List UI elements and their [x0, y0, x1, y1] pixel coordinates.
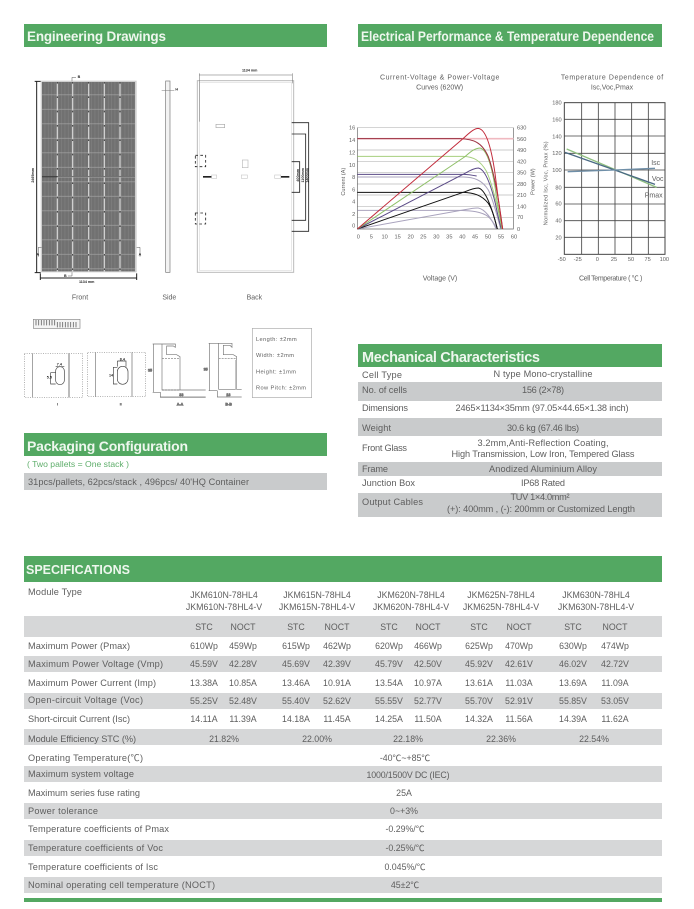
row: power tolerance	[24, 803, 662, 819]
row: maximum power voltage: 42.61V	[505, 659, 533, 669]
row: maximum power voltage: 42.39V	[323, 659, 351, 669]
chart: current-voltage and power-voltage curves: Curves (620W)	[416, 85, 463, 92]
row: module type: JKM625N-78HL4-V	[463, 602, 539, 612]
drawing: front view: B	[64, 274, 67, 278]
panel: packaging configuration	[24, 433, 327, 490]
row: maximum power: 625Wp	[465, 641, 493, 651]
chart: current-voltage and power-voltage curves: 490	[517, 148, 526, 154]
row: series fuse rating: 25A	[396, 788, 412, 798]
row: module type: Module Type	[28, 587, 82, 597]
row: dimensions: 2465×1134×35mm (97.05×44.65×1.38 inch)	[456, 403, 628, 413]
detail: I	[24, 353, 83, 407]
chart: temperature dependence: 160	[552, 117, 562, 123]
row: output cables: Output Cables	[362, 497, 423, 507]
row: maximum power current: Maximum Power Current (Imp)	[28, 678, 156, 688]
heading: electrical performance	[358, 24, 662, 47]
row: maximum power current: 11.03A	[505, 678, 533, 688]
detail: A-A profile: 35	[148, 368, 152, 372]
row: module type: JKM620N-78HL4	[377, 590, 445, 600]
heading: mechanical characteristics: Mechanical Characteristics	[362, 350, 540, 366]
panel: specifications	[24, 556, 662, 902]
heading: engineering drawings: Engineering Drawings	[27, 29, 166, 44]
row: maximum power current: 13.54A	[375, 678, 403, 688]
chart: current-voltage and power-voltage curves: 45	[472, 235, 478, 241]
chart: current-voltage and power-voltage curves	[341, 74, 536, 283]
heading: mechanical characteristics	[358, 344, 662, 367]
row: maximum power current	[28, 678, 629, 688]
row: short-circuit current: 11.62A	[601, 714, 629, 724]
chart: current-voltage and power-voltage curves: 60	[511, 235, 517, 241]
row: junction box	[362, 478, 565, 488]
panel: electrical performance	[341, 24, 669, 283]
detail: II: II	[120, 403, 122, 407]
row: short-circuit current: 14.18A	[282, 714, 310, 724]
row: maximum power voltage: 45.59V	[190, 659, 218, 669]
row: maximum power current: 10.97A	[414, 678, 442, 688]
row: junction box: Junction Box	[362, 478, 415, 488]
row: series fuse rating: Maximum series fuse rating	[28, 788, 140, 798]
row: temperature coefficient Pmax: Temperature coefficients of Pmax	[28, 824, 169, 834]
row: module type: JKM610N-78HL4	[190, 590, 258, 600]
note: stack composition: ( Two pallets = One stack )	[27, 459, 129, 469]
row: maximum power voltage: 45.69V	[282, 659, 310, 669]
chart: current-voltage and power-voltage curves: 0	[517, 227, 520, 233]
row: module type	[28, 587, 634, 612]
row: short-circuit current: 11.39A	[229, 714, 257, 724]
row: nominal operating cell temperature: 45±2℃	[391, 880, 419, 890]
chart: temperature dependence: Cell Temperature ( ℃ )	[579, 275, 642, 283]
row: open-circuit voltage: 52.62V	[323, 696, 351, 706]
chart: temperature dependence: 140	[552, 135, 562, 141]
row: open-circuit voltage: 52.91V	[505, 696, 533, 706]
chart: current-voltage and power-voltage curves: 5	[370, 235, 373, 241]
heading: specifications	[24, 556, 662, 582]
detail: connector strip	[33, 319, 80, 328]
tolerance box: Length: ±2mm	[256, 337, 297, 343]
chart: current-voltage and power-voltage curves: Voltage (V)	[423, 276, 457, 283]
chart: current-voltage and power-voltage curves: 140	[517, 204, 526, 210]
row: frame: Anodized Aluminium Alloy	[489, 464, 597, 474]
drawing: side view: Side	[162, 295, 176, 302]
row: dimensions	[362, 403, 628, 413]
row: maximum power: 474Wp	[601, 641, 629, 651]
detail: B-B profile: 35	[204, 368, 208, 372]
packaging quantities: 31pcs/pallets, 62pcs/stack , 496pcs/ 40'HQ Container	[28, 477, 249, 487]
row: maximum power: 630Wp	[559, 641, 587, 651]
row: number of cells: No. of cells	[362, 385, 407, 395]
chart: temperature dependence: 60	[555, 202, 562, 208]
chart: current-voltage and power-voltage curves: 8	[352, 175, 355, 181]
chart: current-voltage and power-voltage curves: 16	[349, 126, 355, 132]
drawing: back view: 1134 mm	[242, 69, 258, 73]
row: open-circuit voltage: 52.48V	[229, 696, 257, 706]
row: short-circuit current: 11.50A	[414, 714, 442, 724]
chart: temperature dependence: 100	[660, 257, 669, 263]
row: maximum power voltage: 45.79V	[375, 659, 403, 669]
chart: current-voltage and power-voltage curves: 2	[352, 212, 355, 218]
row: temperature coefficient Voc	[24, 840, 662, 856]
row: maximum power: 459Wp	[229, 641, 257, 651]
row: maximum power current: 11.09A	[601, 678, 629, 688]
row: power tolerance: 0~+3%	[390, 806, 418, 816]
row: maximum power voltage: 46.02V	[559, 659, 587, 669]
chart: current-voltage and power-voltage curves: 630	[517, 126, 526, 132]
row: weight: 30.6 kg (67.46 lbs)	[507, 423, 579, 433]
chart: current-voltage and power-voltage curves: 10	[382, 235, 388, 241]
row: cell type: N type Mono-crystalline	[494, 369, 592, 379]
row: open-circuit voltage	[24, 693, 662, 709]
row: maximum power voltage: Maximum Power Voltage (Vmp)	[28, 659, 163, 669]
chart: current-voltage and power-voltage curves: 0	[357, 235, 360, 241]
row: maximum power voltage: 45.92V	[465, 659, 493, 669]
chart: temperature dependence: 100	[552, 168, 562, 174]
chart: temperature dependence: 180	[552, 101, 562, 107]
row: test conditions: NOCT	[416, 622, 441, 632]
row: junction box: IP68 Rated	[521, 478, 565, 488]
row: module type: JKM625N-78HL4	[467, 590, 535, 600]
row: maximum power: 620Wp	[375, 641, 403, 651]
row: maximum power voltage: 42.28V	[229, 659, 257, 669]
row: module type: JKM630N-78HL4	[562, 590, 630, 600]
heading: packaging configuration	[24, 433, 327, 456]
row: temperature coefficient Pmax: -0.29%/℃	[385, 824, 425, 834]
row: nominal operating cell temperature: Nominal operating cell temperature (NOCT)	[28, 880, 215, 890]
chart: current-voltage and power-voltage curves: 6	[352, 187, 355, 193]
drawing: back view: 1100mm	[301, 167, 305, 183]
chart: current-voltage and power-voltage curves: 50	[485, 235, 491, 241]
chart: temperature dependence: Voc	[652, 176, 664, 183]
heading: specifications: SPECIFICATIONS	[26, 563, 130, 577]
chart: current-voltage and power-voltage curves: 210	[517, 193, 526, 199]
chart: temperature dependence: 20	[555, 235, 562, 241]
row: short-circuit current: Short-circuit Current (Isc)	[28, 714, 130, 724]
heading: electrical performance: Electrical Performance & Temperature Dependence	[361, 29, 654, 44]
chart: current-voltage and power-voltage curves: Current (A)	[341, 168, 347, 196]
row: test conditions	[24, 616, 662, 637]
row: cell type	[362, 369, 592, 380]
row: output cables: (+): 400mm , (-): 200mm or Customized Length	[447, 504, 635, 514]
chart: current-voltage and power-voltage curves: 12	[349, 150, 355, 156]
row: module efficiency	[24, 729, 662, 745]
chart: current-voltage and power-voltage curves: 25	[420, 235, 426, 241]
row: open-circuit voltage: 55.70V	[465, 696, 493, 706]
drawing: front view: 1134 mm	[79, 280, 95, 284]
row: open-circuit voltage: 52.77V	[414, 696, 442, 706]
chart: temperature dependence: 50	[628, 257, 634, 263]
chart: current-voltage and power-voltage curves: 35	[446, 235, 452, 241]
chart: temperature dependence: Pmax	[645, 193, 663, 200]
drawing: front view	[31, 75, 142, 302]
row: test conditions: STC	[287, 622, 305, 632]
chart: temperature dependence: 0	[596, 257, 599, 263]
drawing: front view: A	[37, 253, 40, 257]
row: maximum power current: 10.91A	[323, 678, 351, 688]
detail: A-A profile	[148, 344, 206, 407]
chart: current-voltage and power-voltage curves: 55	[498, 235, 504, 241]
chart: current-voltage and power-voltage curves: 420	[517, 159, 526, 165]
row: maximum system voltage	[24, 766, 662, 782]
row: maximum system voltage: 1000/1500V DC (IEC)	[366, 770, 450, 780]
chart: current-voltage and power-voltage curves: 0	[352, 224, 355, 230]
drawing: back view: 1400mm	[306, 167, 310, 183]
chart: temperature dependence: 25	[611, 257, 617, 263]
packaging quantities	[24, 473, 327, 490]
chart: current-voltage and power-voltage curves: 560	[517, 137, 526, 143]
chart: current-voltage and power-voltage curves: 4	[352, 199, 355, 205]
detail: A-A profile: A-A	[177, 403, 184, 407]
row: test conditions: NOCT	[231, 622, 256, 632]
row: maximum power current: 13.46A	[282, 678, 310, 688]
chart: temperature dependence: Isc	[651, 160, 661, 167]
row: output cables	[358, 492, 662, 517]
row: module efficiency: 21.82%	[209, 734, 239, 744]
row: cell type: Cell Type	[362, 370, 402, 380]
chart: current-voltage and power-voltage curves: Current-Voltage & Power-Voltage	[380, 74, 499, 81]
row: short-circuit current: 14.11A	[190, 714, 218, 724]
chart: temperature dependence: Temperature Dependence of	[561, 74, 663, 81]
row: dimensions: Dimensions	[362, 403, 408, 413]
row: temperature coefficient Pmax	[28, 824, 425, 834]
row: test conditions: STC	[195, 622, 213, 632]
row: module type: JKM615N-78HL4-V	[279, 602, 355, 612]
row: front glass: High Transmission, Low Iron, Tempered Glass	[452, 449, 635, 459]
row: module type: JKM610N-78HL4-V	[186, 602, 262, 612]
footer bar	[24, 898, 662, 902]
row: frame	[358, 462, 662, 476]
row: temperature coefficient Voc: Temperature coefficients of Voc	[28, 843, 163, 853]
chart: current-voltage and power-voltage curves: 40	[459, 235, 465, 241]
row: front glass: Front Glass	[362, 443, 407, 453]
chart: temperature dependence: -25	[574, 257, 582, 263]
row: open-circuit voltage: 55.40V	[282, 696, 310, 706]
row: maximum power current: 13.38A	[190, 678, 218, 688]
drawing: front view: A	[139, 253, 142, 257]
chart: current-voltage and power-voltage curves: 280	[517, 182, 526, 188]
row: module type: JKM630N-78HL4-V	[558, 602, 634, 612]
panel: mechanical characteristics	[358, 344, 662, 517]
drawing: front view: Front	[72, 295, 88, 302]
row: short-circuit current: 11.56A	[505, 714, 533, 724]
row: short-circuit current: 14.32A	[465, 714, 493, 724]
row: test conditions: STC	[380, 622, 398, 632]
chart: temperature dependence: 80	[555, 185, 562, 191]
row: module efficiency: 22.36%	[486, 734, 516, 744]
chart: temperature dependence	[543, 74, 669, 283]
drawing: frame details	[24, 319, 312, 407]
row: maximum power voltage	[24, 656, 662, 672]
row: maximum power: 470Wp	[505, 641, 533, 651]
row: front glass	[362, 438, 635, 459]
tolerance box: Height: ±1mm	[256, 370, 296, 376]
chart: current-voltage and power-voltage curves: Power (W)	[530, 168, 536, 195]
row: open-circuit voltage: 55.85V	[559, 696, 587, 706]
row: open-circuit voltage: 55.55V	[375, 696, 403, 706]
row: test conditions: STC	[470, 622, 488, 632]
drawing: front view: B	[78, 75, 81, 79]
panel: engineering drawings	[24, 24, 327, 407]
detail: I: I	[57, 403, 58, 407]
chart: temperature dependence: 40	[555, 219, 562, 225]
row: short-circuit current	[28, 714, 629, 724]
drawing: back view: 400mm	[296, 168, 300, 182]
detail: II	[88, 352, 146, 407]
chart: current-voltage and power-voltage curves: 70	[517, 215, 523, 221]
tolerance box: Row Pitch: ±2mm	[256, 386, 306, 392]
row: nominal operating cell temperature	[24, 877, 662, 893]
row: test conditions: NOCT	[603, 622, 628, 632]
row: maximum power: 466Wp	[414, 641, 442, 651]
row: number of cells	[358, 382, 662, 401]
row: open-circuit voltage: Open-circuit Voltage (Voc)	[28, 695, 143, 705]
tolerance box: Width: ±2mm	[256, 353, 294, 359]
row: module efficiency: 22.18%	[393, 734, 423, 744]
row: operating temperature	[28, 753, 430, 763]
row: series fuse rating	[28, 788, 412, 798]
detail: B-B profile	[204, 343, 242, 407]
row: number of cells: 156 (2×78)	[522, 385, 564, 395]
row: test conditions: STC	[564, 622, 582, 632]
row: test conditions: NOCT	[507, 622, 532, 632]
drawing: front view: 2465mm	[31, 167, 35, 183]
row: maximum power: 615Wp	[282, 641, 310, 651]
row: weight: Weight	[362, 423, 391, 433]
row: module efficiency: Module Efficiency STC (%)	[28, 734, 136, 744]
detail: I: 5.5	[47, 376, 52, 380]
row: test conditions: NOCT	[325, 622, 350, 632]
chart: temperature dependence: 75	[645, 257, 651, 263]
row: maximum power: 610Wp	[190, 641, 218, 651]
drawing: side view	[162, 81, 178, 302]
detail: II: 14	[109, 373, 114, 377]
heading: packaging configuration: Packaging Configuration	[27, 438, 188, 454]
tolerance box	[252, 328, 312, 398]
detail: II: 8.4	[120, 357, 126, 361]
row: front glass: 3.2mm,Anti-Reflection Coating,	[478, 438, 608, 448]
chart: temperature dependence: 120	[552, 151, 562, 157]
row: short-circuit current: 11.45A	[323, 714, 351, 724]
detail: A-A profile: 33	[179, 393, 183, 397]
row: maximum system voltage: Maximum system voltage	[28, 769, 134, 779]
chart: current-voltage and power-voltage curves: 14	[349, 138, 355, 144]
row: short-circuit current: 14.25A	[375, 714, 403, 724]
row: module efficiency: 22.54%	[579, 734, 609, 744]
chart: current-voltage and power-voltage curves: 15	[395, 235, 401, 241]
chart: current-voltage and power-voltage curves: 350	[517, 171, 526, 177]
row: module efficiency: 22.00%	[302, 734, 332, 744]
chart: temperature dependence: -50	[558, 257, 566, 263]
row: maximum power	[28, 641, 629, 651]
row: temperature coefficient Isc: Temperature coefficients of Isc	[28, 862, 158, 872]
row: maximum power: 462Wp	[323, 641, 351, 651]
row: module type: JKM620N-78HL4-V	[373, 602, 449, 612]
row: maximum power voltage: 42.50V	[414, 659, 442, 669]
row: power tolerance: Power tolerance	[28, 806, 98, 816]
drawing: back view: Back	[247, 295, 263, 302]
row: output cables: TUV 1×4.0mm²	[510, 492, 570, 502]
row: temperature coefficient Isc: 0.045%/℃	[384, 862, 426, 872]
chart: current-voltage and power-voltage curves: 10	[349, 163, 355, 169]
row: maximum power voltage: 42.72V	[601, 659, 629, 669]
row: maximum power: Maximum Power (Pmax)	[28, 641, 130, 651]
row: temperature coefficient Voc: -0.25%/℃	[385, 843, 425, 853]
detail: I: 7.4	[57, 363, 63, 367]
drawing: back view	[195, 69, 310, 302]
row: maximum power current: 10.85A	[229, 678, 257, 688]
detail: B-B profile: 18	[226, 393, 230, 397]
row: temperature coefficient Isc	[28, 862, 426, 872]
row: open-circuit voltage: 53.05V	[601, 696, 629, 706]
row: frame: Frame	[362, 464, 388, 474]
row: operating temperature: Operating Temperature(℃)	[28, 753, 143, 763]
chart: current-voltage and power-voltage curves: 30	[433, 235, 439, 241]
row: short-circuit current: 14.39A	[559, 714, 587, 724]
chart: temperature dependence: Isc,Voc,Pmax	[591, 85, 634, 92]
row: operating temperature: -40℃~+85℃	[380, 753, 430, 763]
detail: B-B profile: B-B	[225, 403, 232, 407]
drawing: side view: H	[175, 88, 178, 92]
row: module type: JKM615N-78HL4	[283, 590, 351, 600]
heading: engineering drawings	[24, 24, 327, 47]
row: open-circuit voltage: 55.25V	[190, 696, 218, 706]
row: maximum power current: 13.61A	[465, 678, 493, 688]
row: maximum power current: 13.69A	[559, 678, 587, 688]
chart: current-voltage and power-voltage curves: 20	[408, 235, 414, 241]
row: weight	[358, 418, 662, 436]
chart: temperature dependence: Normalized Isc, Voc, Pmax (%)	[543, 141, 549, 225]
